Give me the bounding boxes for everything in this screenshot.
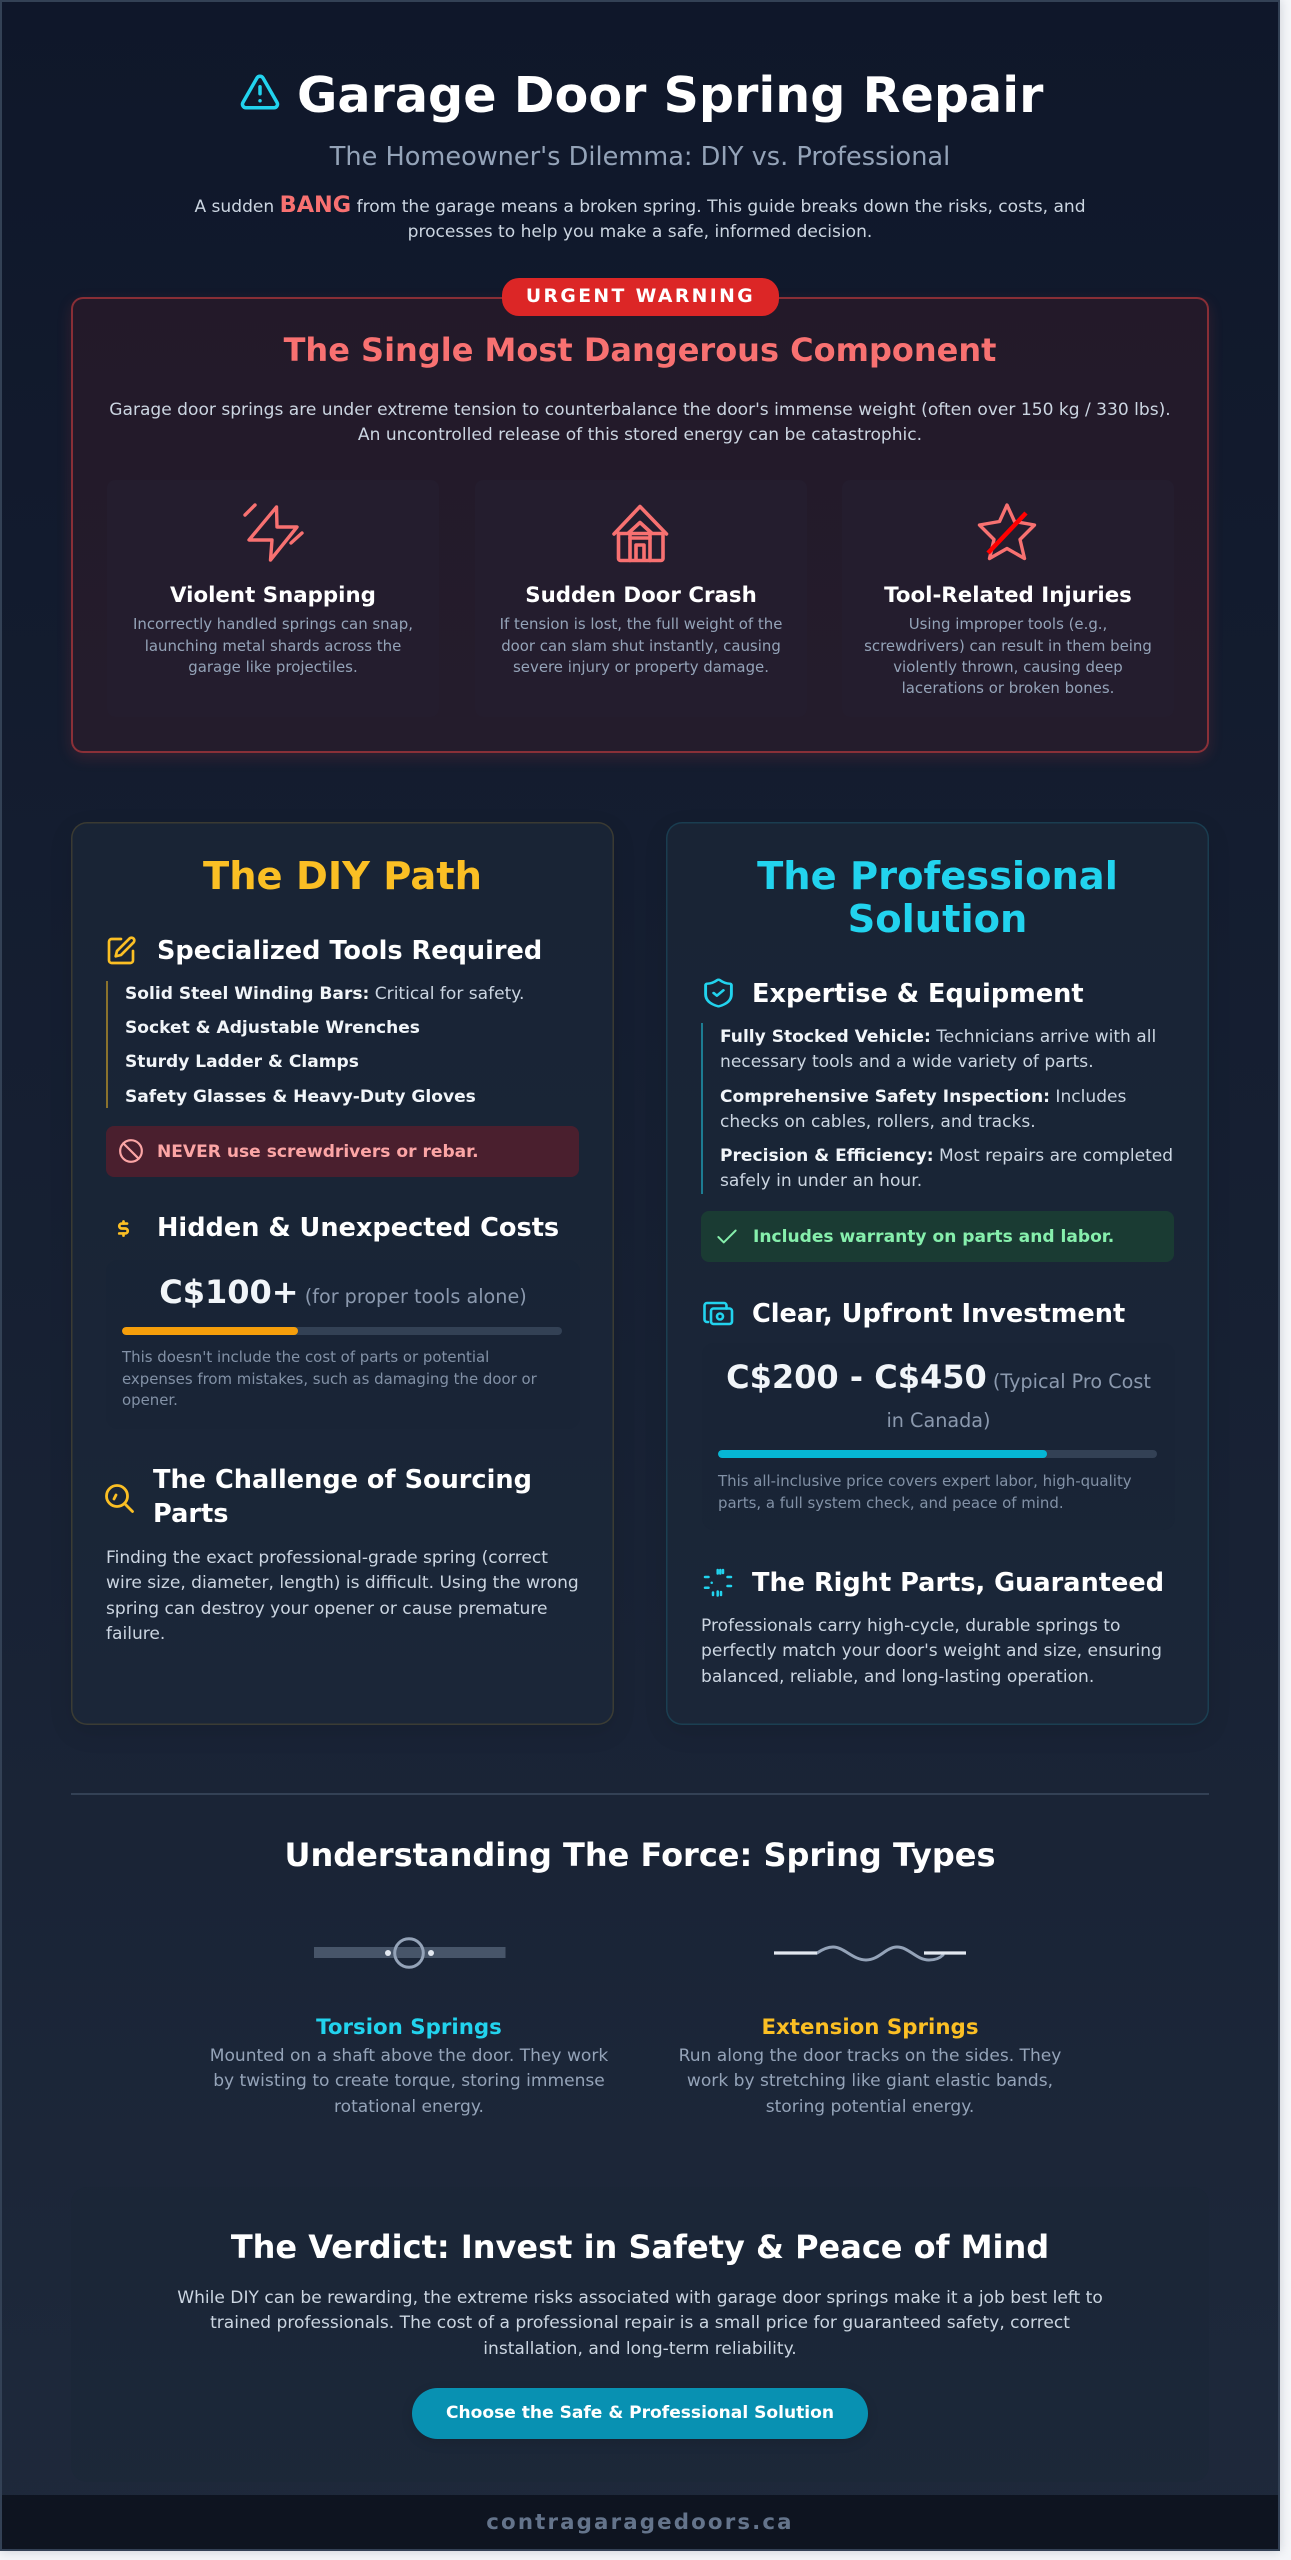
verdict heading: The Verdict: Invest in Safety & Peace of Mind (231, 2228, 1049, 2266)
card: violent snapping: launching metal shards across the (145, 637, 401, 655)
text: right parts (701, 1616, 1162, 1687)
verdict text: trained professionals. The cost of a professional repair is a small price for guaranteed safety, correct (210, 2313, 1070, 2333)
card: sudden door crash: If tension is lost, the full weight of the (500, 615, 782, 633)
torsion text (210, 2046, 608, 2117)
card: tool-related injuries: Tool-Related Injuries (884, 583, 1132, 608)
list: expertise: Precision & Efficiency: Most repairs are completed (720, 1146, 1173, 1166)
torsion title: Torsion Springs (316, 2015, 502, 2040)
professional cost note (718, 1472, 1132, 1512)
card: violent snapping (107, 480, 439, 717)
alert: never use screwdrivers: NEVER use screwdrivers or rebar. (157, 1142, 479, 1162)
list: expertise: Comprehensive Safety Inspection: Includes (720, 1087, 1126, 1107)
heading: sourcing parts: The Challenge of Sourcing (153, 1465, 532, 1495)
intro text (194, 192, 1086, 242)
title: Garage Door Spring Repair (297, 66, 1043, 124)
verdict text (177, 2288, 1103, 2359)
card: tool-related injuries: Using improper tools (e.g., (909, 615, 1107, 633)
card: tool-related injuries: violently thrown, causing deep (893, 658, 1123, 676)
professional price: C$200 - C$450 (Typical Pro Cost (726, 1358, 1151, 1396)
heading: spring types: Understanding The Force: Spring Types (284, 1836, 996, 1874)
list: tools: Sturdy Ladder & Clamps (125, 1052, 359, 1072)
list: expertise: necessary tools and a wide variety of parts. (720, 1052, 1094, 1072)
icon: extension spring (774, 1946, 966, 1962)
alert: warranty (701, 1211, 1174, 1262)
heading: specialized tools: Specialized Tools Required (157, 936, 542, 966)
icon: search (105, 1484, 134, 1513)
text: sourcing parts: spring can destroy your opener or cause premature (106, 1599, 547, 1619)
card: sudden door crash (475, 480, 807, 717)
text: sourcing parts: failure. (106, 1624, 165, 1644)
professional heading (757, 854, 1118, 942)
text: sourcing parts (106, 1548, 579, 1644)
spring type: torsion (210, 1937, 608, 2117)
footer website: contragaragedoors.ca (486, 2510, 794, 2535)
spring type: extension (679, 1946, 1061, 2117)
card: violent snapping: Violent Snapping (170, 583, 376, 608)
professional heading: Solution (848, 897, 1027, 942)
panel: urgent warning (71, 297, 1209, 753)
badge: urgent warning: URGENT WARNING (526, 286, 755, 307)
DIY cost note: opener. (122, 1391, 178, 1409)
list: tools: Socket & Adjustable Wrenches (125, 1018, 420, 1038)
alert: never use screwdrivers (106, 1126, 579, 1177)
card: violent snapping: Incorrectly handled springs can snap, (133, 615, 413, 633)
button: choose professional: Choose the Safe & Professional Solution (446, 2403, 834, 2423)
panel: the DIY path (71, 822, 614, 1725)
warning heading: The Single Most Dangerous Component (284, 331, 996, 369)
text: sourcing parts: wire size, diameter, length) is difficult. Using the wrong (106, 1573, 579, 1593)
heading: sourcing parts: Parts (153, 1499, 228, 1529)
professional cost note: parts, a full system check, and peace of mind. (718, 1494, 1064, 1512)
text: right parts: Professionals carry high-cycle, durable springs to (701, 1616, 1120, 1636)
heading: expertise: Expertise & Equipment (752, 979, 1084, 1009)
extension text: storing potential energy. (766, 2097, 974, 2117)
icon: check (717, 1230, 737, 1244)
icon: lightning bolt (243, 503, 304, 562)
torsion text: rotational energy. (334, 2097, 484, 2117)
heading: sourcing parts (153, 1465, 532, 1529)
card: tool-related injuries (842, 480, 1174, 717)
icon: dollar (118, 1220, 130, 1237)
card: sudden door crash: Sudden Door Crash (525, 583, 757, 608)
icon: banknotes (703, 1302, 734, 1326)
torsion text: by twisting to create torque, storing immense (213, 2071, 605, 2091)
warning text: Garage door springs are under extreme tension to counterbalance the door's immense weight (often over 150 kg / 330 lbs). (109, 400, 1171, 420)
DIY cost note: expenses from mistakes, such as damaging the door or (122, 1370, 537, 1388)
cost box: DIY (106, 1260, 580, 1429)
heading: right parts: The Right Parts, Guaranteed (752, 1568, 1164, 1598)
verdict text: installation, and long-term reliability. (483, 2339, 797, 2359)
professional price (726, 1358, 1151, 1432)
text: right parts: balanced, reliable, and long-lasting operation. (701, 1667, 1094, 1687)
intro text: processes to help you make a safe, informed decision. (408, 222, 872, 242)
DIY cost bar (122, 1326, 562, 1334)
extension text: work by stretching like giant elastic bands, (687, 2071, 1053, 2091)
heading: upfront investment: Clear, Upfront Investment (752, 1299, 1125, 1329)
list: tools: Safety Glasses & Heavy-Duty Gloves (125, 1087, 476, 1107)
heading: hidden costs: Hidden & Unexpected Costs (157, 1213, 559, 1243)
DIY heading: The DIY Path (203, 854, 482, 899)
list: expertise: Fully Stocked Vehicle: Technicians arrive with all (720, 1027, 1156, 1047)
icon: parts loader (704, 1568, 732, 1597)
icon: alert triangle (240, 74, 280, 110)
badge: urgent warning (502, 278, 779, 316)
list: expertise: checks on cables, rollers, and tracks. (720, 1112, 1036, 1132)
icon: pencil square (108, 936, 136, 964)
list: tools (106, 981, 579, 1108)
icon: crossed star (978, 503, 1036, 560)
professional cost note: This all-inclusive price covers expert labor, high-quality (718, 1472, 1132, 1490)
DIY cost note (122, 1348, 537, 1409)
torsion text: Mounted on a shaft above the door. They work (210, 2046, 608, 2066)
extension text: Run along the door tracks on the sides. They (679, 2046, 1061, 2066)
text: right parts: perfectly match your door's weight and size, ensuring (701, 1641, 1162, 1661)
professional price: in Canada) (886, 1409, 991, 1432)
panel: the professional solution (666, 822, 1209, 1725)
cost box: professional (702, 1343, 1175, 1530)
button: choose professional (412, 2388, 868, 2439)
DIY price: C$100+ (for proper tools alone) (159, 1273, 527, 1311)
card: sudden door crash: door can slam shut instantly, causing (501, 637, 781, 655)
card: tool-related injuries: lacerations or broken bones. (902, 679, 1114, 697)
warning text: An uncontrolled release of this stored energy can be catastrophic. (358, 425, 922, 445)
icon: garage house (612, 504, 668, 562)
card: violent snapping: garage like projectiles. (188, 658, 358, 676)
card: sudden door crash: severe injury or property damage. (513, 658, 769, 676)
verdict text: While DIY can be rewarding, the extreme risks associated with garage door springs make it a job best left to (177, 2288, 1103, 2308)
text: sourcing parts: Finding the exact professional-grade spring (correct (106, 1548, 548, 1568)
list: expertise: safely in under an hour. (720, 1171, 922, 1191)
panel: the verdict (71, 2187, 1209, 2482)
icon: shield check (704, 978, 733, 1008)
list: expertise (701, 1023, 1174, 1194)
warning text (109, 400, 1171, 445)
intro text: A sudden BANG from the garage means a broken spring. This guide breaks down the risks, costs, and (194, 192, 1086, 218)
DIY cost note: This doesn't include the cost of parts or potential (122, 1348, 489, 1366)
icon: torsion spring (314, 1937, 506, 1969)
extension title: Extension Springs (761, 2015, 979, 2040)
card: tool-related injuries: screwdrivers) can result in them being (864, 637, 1152, 655)
icon: ban (119, 1139, 143, 1163)
extension text (679, 2046, 1061, 2117)
subtitle: The Homeowner's Dilemma: DIY vs. Professional (330, 142, 950, 172)
alert: warranty: Includes warranty on parts and labor. (753, 1227, 1114, 1247)
professional heading: The Professional (757, 854, 1118, 899)
footer (2, 2495, 1278, 2549)
list: tools: Solid Steel Winding Bars: Critical for safety. (125, 984, 524, 1004)
professional cost bar (718, 1450, 1157, 1458)
